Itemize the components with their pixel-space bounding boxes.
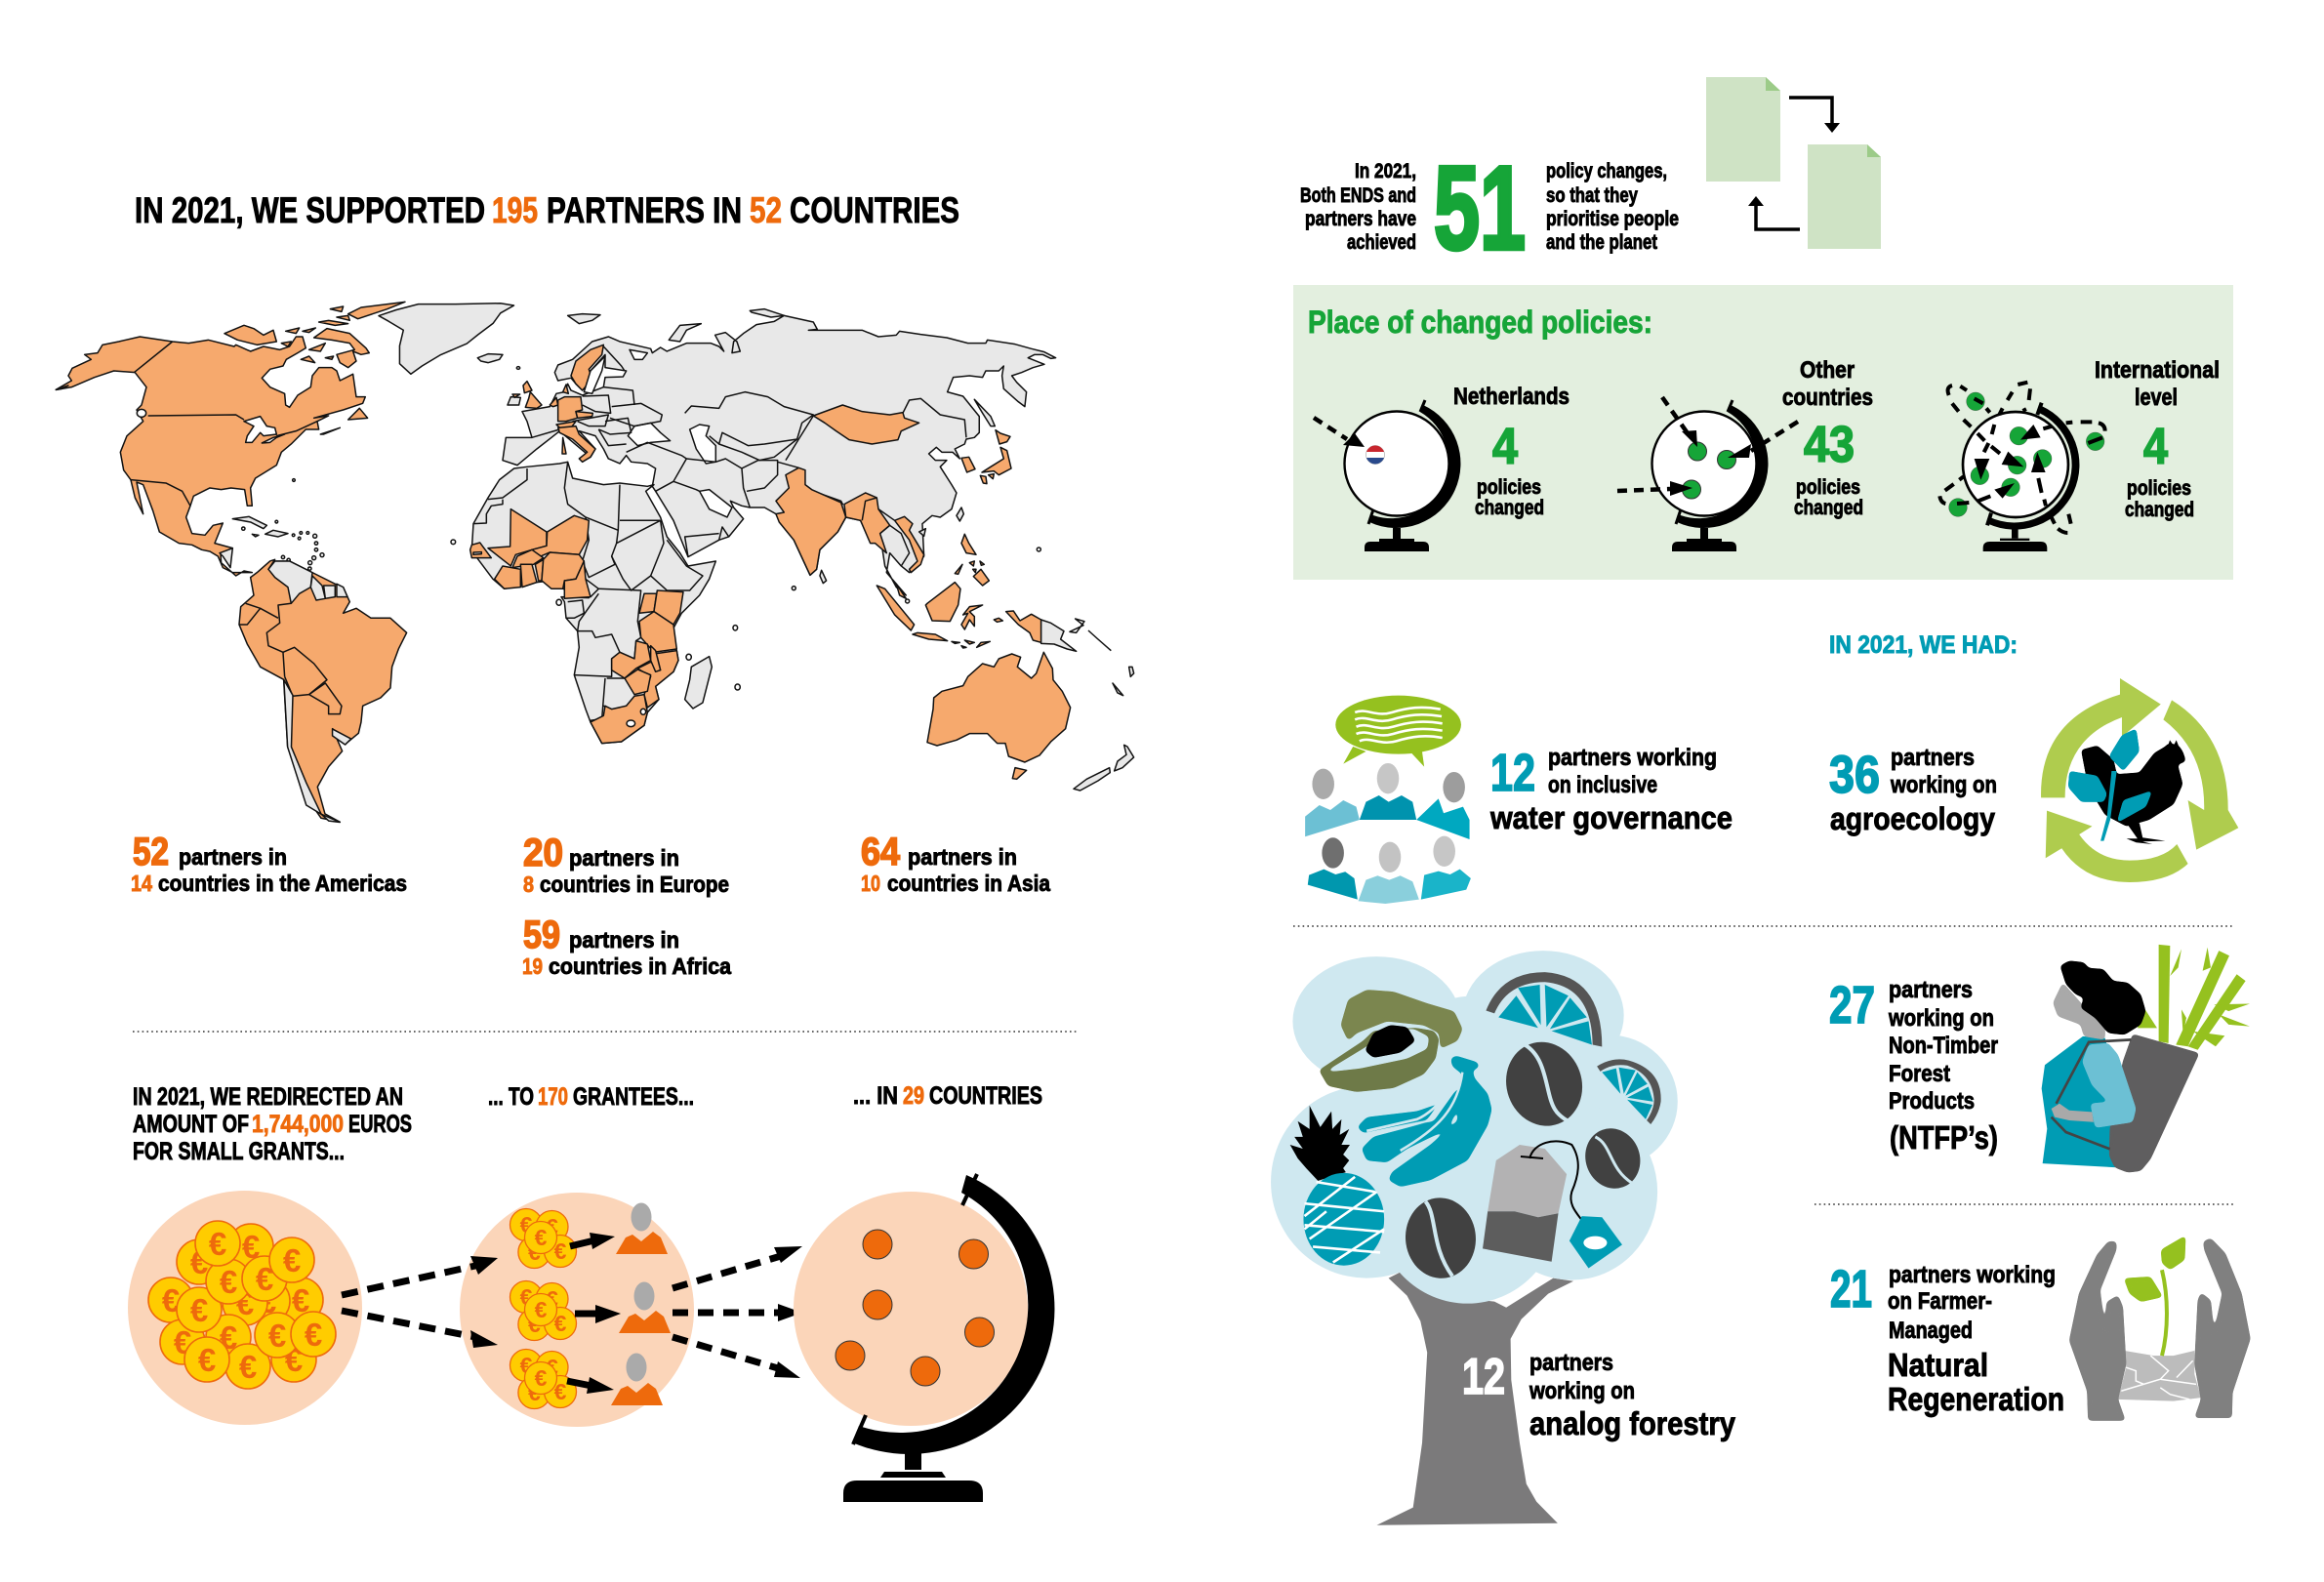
euro coins circle: € (305, 1317, 322, 1353)
grantee group 2: € (520, 1284, 533, 1310)
text: farmer-managed natural regeneration (1830, 1260, 2064, 1417)
euro coins circle: € (292, 1282, 309, 1318)
text: non-timber forest products: Forest (1889, 1061, 1950, 1087)
grantee group 3: € (520, 1353, 533, 1378)
arrows from coins to grantees (342, 1256, 498, 1348)
text: analog forestry: 12 (1462, 1349, 1505, 1405)
international figures (2095, 357, 2220, 521)
icon: Dutch flag (1366, 445, 1384, 465)
arrows from grantees to globe (673, 1246, 802, 1378)
other countries figures: 43 (1804, 417, 1855, 473)
Europe label: countries in Europe (540, 872, 729, 897)
Asia label: countries in Asia (887, 871, 1050, 896)
small grants headings: FOR SMALL GRANTS... (133, 1138, 345, 1165)
policy changes headline: In 2021, (1355, 160, 1416, 183)
text: non-timber forest products (1829, 976, 1998, 1156)
international figures: level (2135, 385, 2178, 411)
Americas label (131, 831, 407, 896)
Netherlands figures: Netherlands (1453, 384, 1570, 410)
Europe label: 8 (523, 872, 534, 897)
euro coins circle: € (242, 1229, 260, 1265)
small grants headings: GRANTEES... (573, 1083, 694, 1111)
text: agroecology: agroecology (1830, 801, 1995, 836)
grantee group 2: € (546, 1286, 558, 1312)
Netherlands figures: changed (1475, 497, 1544, 519)
policy changes headline: Both ENDS and (1300, 184, 1416, 207)
grantee group 2: € (535, 1297, 548, 1322)
grantee group 3 (510, 1349, 663, 1409)
icon: pineapple (1290, 1106, 1384, 1266)
euro coins circle: € (220, 1264, 237, 1300)
small grants headings: 29 (903, 1082, 924, 1110)
world map (56, 302, 1134, 822)
euro coins circle: € (220, 1319, 237, 1356)
Africa label: countries in Africa (549, 953, 731, 979)
icon: hands holding seedling (2069, 1236, 2251, 1421)
Asia label (861, 831, 1050, 896)
small grants headings (133, 1082, 1042, 1165)
text: agroecology: working on (1890, 772, 1997, 798)
grantee group 3: € (528, 1380, 541, 1405)
text: agroecology: 36 (1829, 746, 1880, 804)
euro coins circle: € (162, 1282, 180, 1318)
Europe label (523, 832, 729, 897)
Netherlands figures: 4 (1492, 419, 1518, 475)
policy changes headline (1300, 142, 1679, 274)
Africa label: 19 (522, 953, 543, 979)
policy changes headline: prioritise people (1546, 208, 1679, 230)
text: farmer-managed natural regeneration: partners working (1889, 1262, 2056, 1288)
grantee group 2: € (528, 1312, 541, 1337)
text: agroecology: partners (1891, 745, 1975, 771)
grantee group 2: € (554, 1311, 567, 1336)
euro coins circle: € (190, 1292, 208, 1328)
Asia label: 64 (861, 831, 901, 873)
grantee group 2 (510, 1280, 671, 1341)
small grants headings: IN 2021, WE REDIRECTED AN (133, 1083, 403, 1111)
icon: small lime slice (1597, 1059, 1661, 1124)
icon: bananas (1358, 1056, 1491, 1187)
euro coins circle: € (268, 1318, 286, 1354)
euro coins circle: € (209, 1226, 226, 1262)
Americas label: 14 (131, 871, 152, 896)
title: IN 2021, WE SUPPORTED (135, 190, 485, 230)
grantees circle (460, 1193, 694, 1427)
Netherlands figures: policies (1477, 476, 1541, 499)
large globe with countries (794, 1174, 1054, 1502)
grantee group 1: € (520, 1212, 533, 1237)
other countries figures: policies (1796, 476, 1860, 499)
policy changes headline: partners have (1305, 208, 1416, 230)
policy changes headline: so that they (1546, 184, 1638, 207)
Europe label: 20 (523, 832, 563, 874)
text: non-timber forest products: Non-Timber (1889, 1033, 1998, 1059)
euro coins circle: € (190, 1244, 208, 1280)
text: analog forestry: partners (1529, 1350, 1613, 1376)
text: farmer-managed natural regeneration: Natural (1888, 1347, 1988, 1383)
grantee group 1: € (554, 1238, 567, 1264)
text: non-timber forest products: 27 (1829, 976, 1875, 1034)
icon: water governance group (1305, 696, 1471, 904)
text: agroecology (1829, 745, 1997, 836)
text: non-timber forest products: working on (1888, 1005, 1994, 1032)
title (135, 190, 959, 230)
globe: international level (1939, 383, 2105, 551)
text: non-timber forest products: Products (1889, 1088, 1975, 1115)
euro coins circle: € (259, 1283, 276, 1319)
panel: place of changed policies (1293, 285, 2233, 580)
title: COUNTRIES (790, 190, 959, 230)
Africa label: partners in (569, 927, 679, 953)
euro coins circle (128, 1191, 362, 1425)
Asia label: 10 (861, 871, 880, 896)
icon: woman with basket of bamboo (2042, 945, 2250, 1172)
globe: other countries (1617, 397, 1798, 551)
policy changes headline: 51 (1434, 142, 1526, 274)
euro coins circle: € (198, 1342, 216, 1378)
text: farmer-managed natural regeneration: Regeneration (1888, 1381, 2064, 1417)
Africa label (522, 913, 731, 979)
text: non-timber forest products: (NTFP’s) (1890, 1119, 1998, 1156)
Europe label: partners in (569, 845, 679, 871)
text: water governance: partners working (1548, 745, 1717, 771)
regional partner numbers (131, 831, 1050, 979)
text: non-timber forest products: partners (1889, 977, 1973, 1003)
grantee group 1: € (546, 1214, 558, 1239)
icon: avocado (1319, 990, 1462, 1092)
text: analog forestry (1462, 1349, 1736, 1441)
icon: analog forestry tree (1271, 951, 1678, 1525)
text: water governance: on inclusive (1548, 772, 1657, 798)
euro coins circle: € (256, 1261, 273, 1297)
small grants headings: EUROS (348, 1111, 412, 1138)
grantee group 3: € (546, 1355, 558, 1380)
policy changes headline: policy changes, (1546, 160, 1667, 183)
text: water governance (1489, 744, 1733, 835)
other countries figures (1782, 357, 1873, 519)
grantee group 1: € (535, 1225, 548, 1250)
icon: policy documents with cycle arrows (1706, 77, 1881, 249)
euro coins circle: € (283, 1242, 301, 1278)
title: PARTNERS IN (547, 190, 742, 230)
text: farmer-managed natural regeneration: Managed (1889, 1318, 1973, 1344)
euro coins circle: € (174, 1324, 191, 1360)
Americas label: partners in (179, 844, 287, 870)
Asia label: partners in (908, 844, 1017, 870)
other countries figures: Other (1800, 357, 1855, 384)
small grants headings: COUNTRIES (929, 1082, 1042, 1110)
other countries figures: countries (1782, 385, 1873, 411)
text: analog forestry: working on (1529, 1378, 1635, 1404)
title: 52 (750, 190, 782, 230)
international figures: changed (2125, 499, 2194, 521)
euro coins circle: € (236, 1285, 254, 1321)
international figures: International (2095, 357, 2220, 384)
policy changes headline: achieved (1347, 231, 1416, 254)
other countries figures: changed (1794, 497, 1863, 519)
globe: Netherlands (1314, 400, 1460, 551)
icon: tea bag (1483, 1141, 1622, 1269)
policy changes headline: and the planet (1546, 231, 1657, 254)
euro coins circle: € (285, 1342, 303, 1378)
text: farmer-managed natural regeneration: on Farmer- (1888, 1288, 1992, 1315)
small grants headings: ... TO (488, 1083, 534, 1111)
grantee group 3: € (535, 1365, 548, 1391)
small grants headings: AMOUNT OF (133, 1111, 249, 1138)
grantee group 1 (510, 1202, 668, 1269)
icon: agroecology cycle with hen and plant (2041, 678, 2238, 882)
small grants headings: ... IN (853, 1082, 898, 1110)
Americas label: countries in the Americas (158, 871, 407, 896)
grantee group 3: € (554, 1379, 567, 1404)
international figures: policies (2127, 477, 2191, 500)
heading: in 2021 we had: IN 2021, WE HAD: (1829, 631, 2018, 659)
text: farmer-managed natural regeneration: 21 (1830, 1260, 1872, 1318)
grantee group 1: € (528, 1239, 541, 1265)
international figures: 4 (2143, 419, 2168, 475)
panel heading: Place of changed policies: (1308, 304, 1652, 340)
euro coins circle: € (239, 1349, 257, 1385)
Africa label: 59 (523, 913, 560, 956)
text: water governance: 12 (1490, 744, 1535, 802)
small grants headings: 170 (538, 1083, 568, 1111)
Netherlands figures (1453, 384, 1570, 519)
title: 195 (492, 190, 538, 230)
icon: coffee beans (1394, 1028, 1649, 1292)
icon: lime slice (1486, 972, 1602, 1047)
text: water governance: water governance (1489, 800, 1733, 835)
text: analog forestry: analog forestry (1529, 1405, 1736, 1441)
Americas label: 52 (133, 831, 169, 873)
small grants headings: 1,744,000 (252, 1111, 344, 1138)
